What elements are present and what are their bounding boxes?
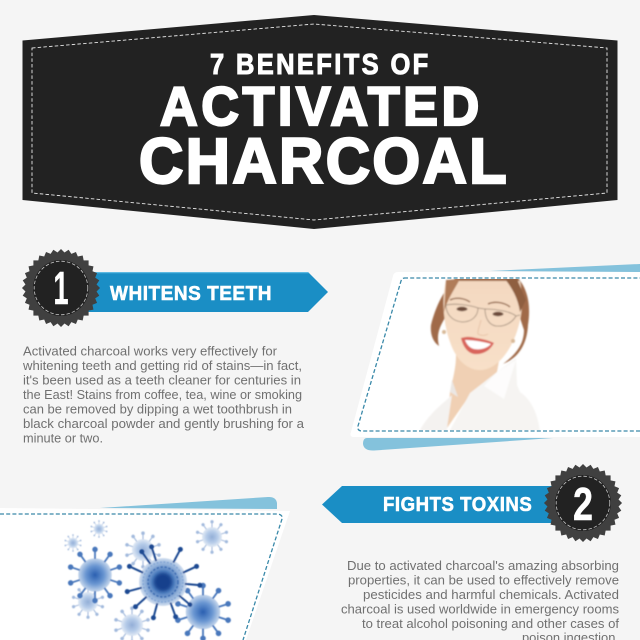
section 2 body text: properties, it can be used to effectively remove [348,574,619,588]
section 2 heading ribbon [322,486,560,523]
image panel: viruses [0,497,290,640]
title banner [22,15,618,229]
section 2 body text: charcoal is used worldwide in emergency rooms [341,602,619,616]
section 2 body text [341,559,619,640]
section 2 body text: pesticides and harmful chemicals. Activated [363,588,619,602]
heading: whitens teeth: WHITENS TEETH [110,283,272,305]
face [443,281,522,370]
badge 2 [544,464,622,542]
section 1 heading ribbon [88,272,328,312]
mouth and teeth [461,337,494,354]
section 1 body text: whitening teeth and getting rid of stains—in fact, [22,359,302,373]
badge 1 [22,249,100,327]
number 1: 1 [53,262,69,314]
heading: fights toxins: FIGHTS TOXINS [383,494,532,516]
shirt [420,395,452,432]
section 1 body text: black charcoal powder and gently brushing for a [23,417,305,431]
section 1 body text: minute or two. [23,432,103,446]
title line: 7 benefits of: 7 BENEFITS OF [210,47,428,80]
section 1 body text: can be removed by dipping a wet toothbrush in [23,402,292,416]
main virus [124,544,203,621]
title line: charcoal: CHARCOAL [139,126,507,197]
brows and eyes [450,298,470,302]
photo panel: smiling woman [350,264,640,451]
small faded viruses [65,520,228,640]
icon: woman portrait [420,276,540,432]
section 1 body text [22,344,305,446]
neck [447,355,500,428]
section 1 body text: it's been used as a teeth cleaner for centuries in [23,374,301,388]
hair [431,276,529,364]
earrings [442,330,446,334]
section 2 body text: to treat alcohol poisoning and other cases of [362,617,619,631]
title line: activated: ACTIVATED [160,76,479,137]
mid viruses [68,547,231,640]
number 2: 2 [573,478,593,530]
section 2 body text: Due to activated charcoal's amazing absorbing [347,559,619,573]
glasses [446,304,520,326]
section 1 body text: the East! Stains from coffee, tea, wine or smoking [23,388,302,402]
section 1 body text: Activated charcoal works very effectively for [23,344,278,358]
icon: virus cluster [65,520,231,640]
